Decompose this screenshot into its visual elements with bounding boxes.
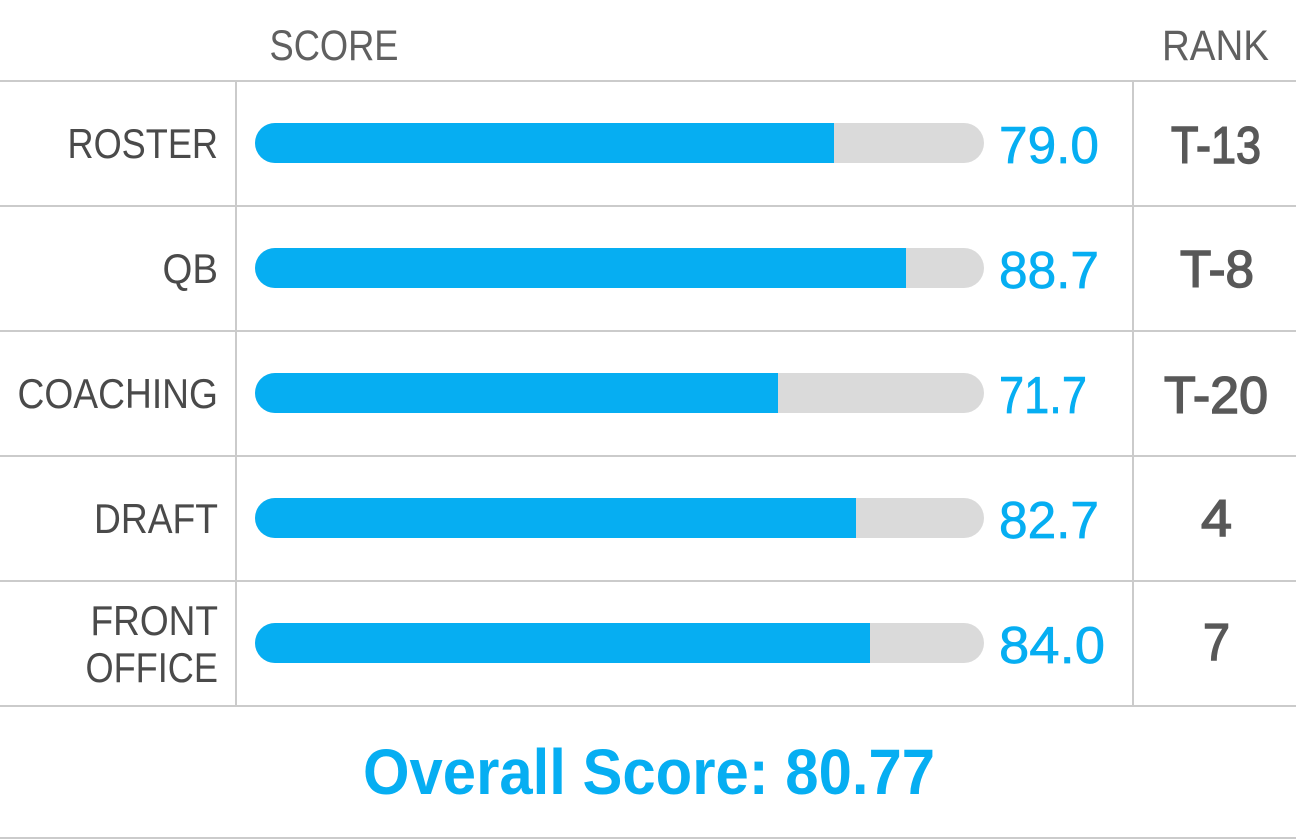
row: front office: 7 [1203, 614, 1230, 672]
row: coaching: T-20 [1164, 367, 1268, 425]
row: draft: DRAFT [94, 495, 218, 542]
row: front office: OFFICE [86, 644, 218, 691]
overall score: Overall Score: 80.77 [363, 736, 935, 808]
row: draft [94, 490, 1232, 550]
row: coaching [18, 367, 1268, 425]
row: qb: 88.7 [999, 242, 1099, 300]
row: front office: 84.0 [999, 617, 1105, 675]
row: roster [68, 117, 1261, 175]
row: coaching: COACHING [18, 370, 218, 417]
row: front office: FRONT [90, 597, 218, 644]
row: roster: 79.0 [999, 117, 1099, 175]
row: front office [86, 597, 1230, 691]
row: qb [162, 241, 1254, 300]
column heading: rank: RANK [1162, 22, 1269, 70]
row: qb: QB [162, 245, 218, 292]
column heading: score: SCORE [270, 22, 398, 70]
row: qb: T-8 [1180, 241, 1254, 299]
row: draft: 82.7 [999, 492, 1099, 550]
row: roster: T-13 [1171, 117, 1261, 175]
row: roster: ROSTER [68, 120, 218, 167]
row: coaching: 71.7 [999, 367, 1087, 425]
row: draft: 4 [1201, 490, 1232, 548]
